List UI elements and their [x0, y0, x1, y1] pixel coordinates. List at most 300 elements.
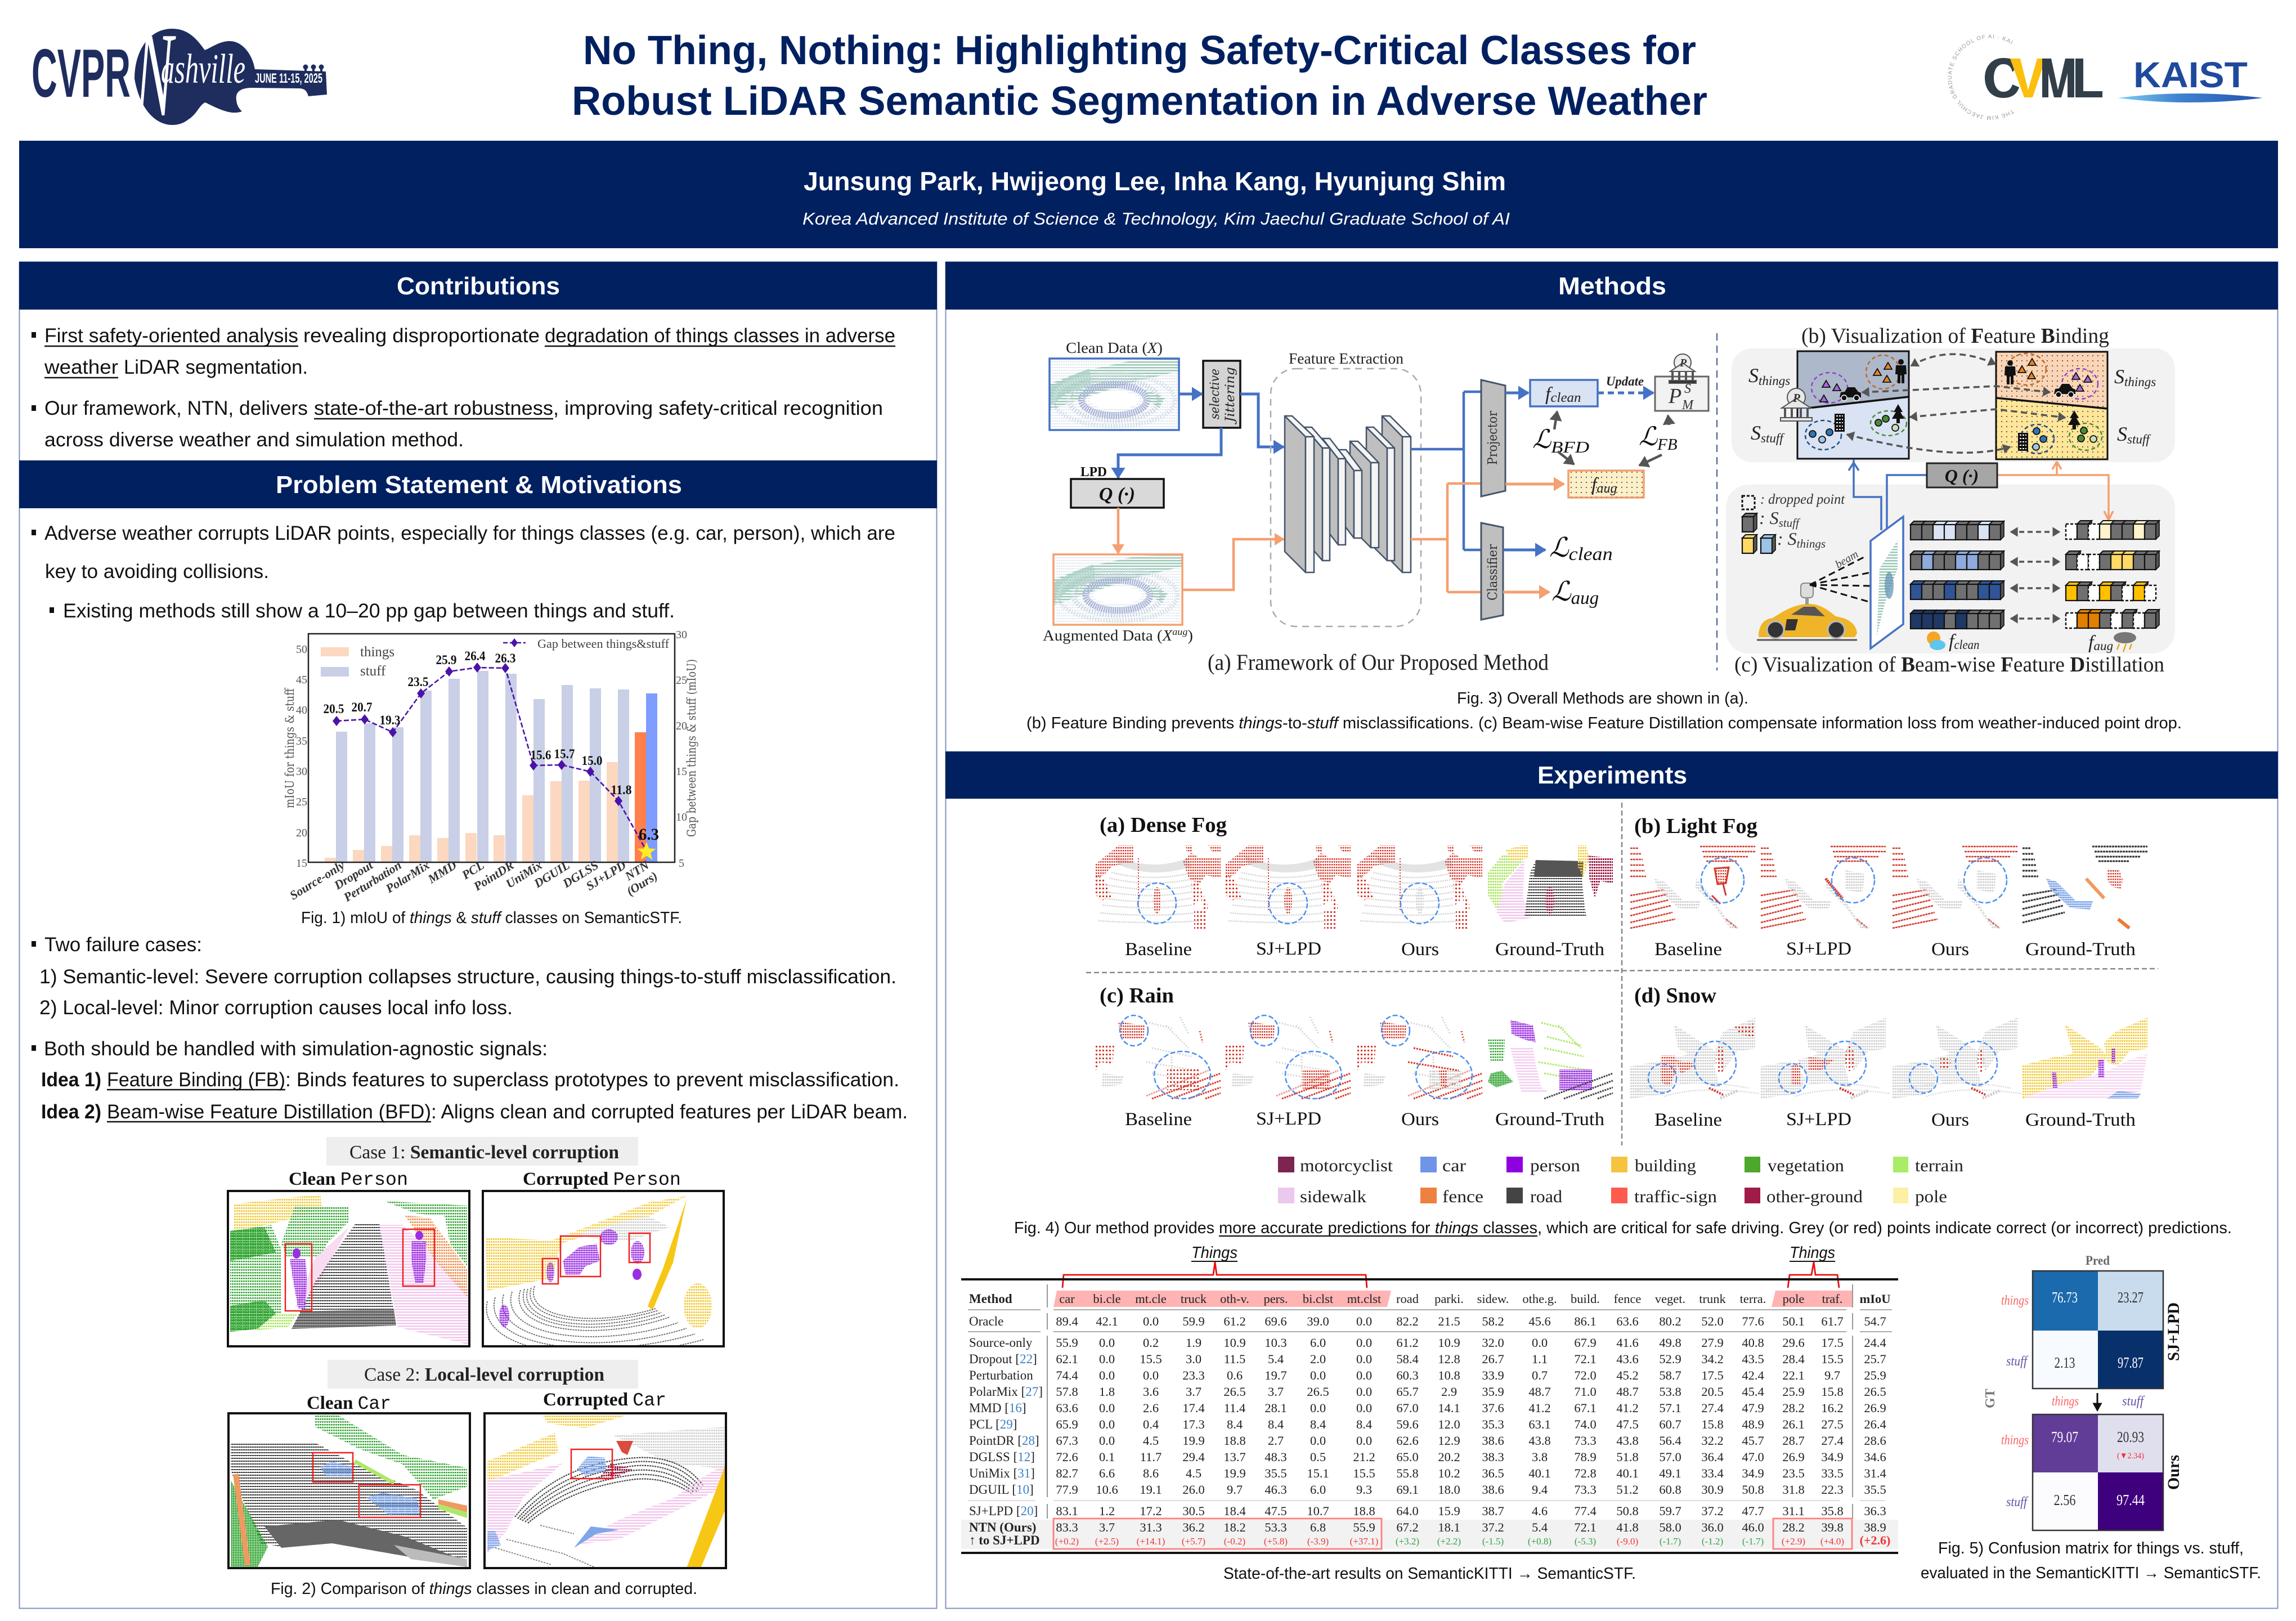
axis labels: things [2001, 1433, 2029, 1448]
axis ticks: 15 [296, 857, 307, 870]
x labels: (Ours) [624, 868, 660, 898]
values: 82.7 [1056, 1466, 1078, 1480]
values: 59.6 [1396, 1417, 1419, 1431]
values: 0.0 [1532, 1336, 1548, 1350]
image labels: SJ+LPD [1786, 1109, 1851, 1130]
method names: UniMix [31] [969, 1466, 1035, 1480]
values: 26.5 [1223, 1385, 1246, 1399]
values: 21.5 [1438, 1314, 1460, 1328]
values: 46.3 [1264, 1483, 1287, 1497]
selective jittering box: selective [1208, 369, 1222, 419]
values: 83.3 [1056, 1520, 1078, 1534]
panel: (d) Snow [1630, 984, 2147, 1130]
values: 50.8 [1742, 1483, 1764, 1497]
augmented data label: aug [1172, 626, 1187, 637]
legend: things [360, 644, 394, 660]
text: problem statement intro: Existing methods still show a 10–20 pp gap between things and stuff. [63, 600, 675, 622]
label: Ours: Ours [2164, 1455, 2183, 1490]
matrix: Ours: 20.93 [2117, 1429, 2144, 1445]
f aug box [1568, 471, 1644, 498]
values: 72.6 [1056, 1450, 1078, 1464]
values: 65.7 [1396, 1385, 1419, 1399]
augmented data image [1053, 554, 1182, 625]
case 1 heading: Case 1: Semantic-level corruption [349, 1142, 619, 1163]
loss BFD: BFD [1551, 438, 1589, 456]
method names: ↑ to SJ+LPD [969, 1533, 1040, 1547]
values: 26.9 [1864, 1401, 1886, 1415]
x labels: DGUIL [531, 858, 572, 891]
values: 26.0 [1182, 1483, 1205, 1497]
x labels: PolarMix [383, 858, 432, 896]
method names: MMD [16] [969, 1401, 1026, 1415]
image labels: Ground-Truth [2025, 1110, 2136, 1130]
value labels [323, 649, 659, 844]
values: 0.0 [1143, 1314, 1159, 1328]
legend [321, 637, 670, 679]
values: 56.4 [1659, 1434, 1681, 1448]
values: truck [1181, 1292, 1207, 1306]
values: 6.8 [1310, 1520, 1326, 1534]
output arrows [1503, 393, 1564, 592]
text: contributions list: , improving safety-critical recognition [553, 397, 883, 419]
axis labels: stuff [2122, 1394, 2145, 1409]
axis labels [1983, 1293, 2145, 1510]
values: 86.1 [1574, 1314, 1597, 1328]
orange arrows augmented [1118, 508, 1284, 590]
axis ticks: 30 [296, 765, 307, 778]
projector [1481, 380, 1505, 496]
values: 37.2 [1482, 1520, 1504, 1534]
values: 23.5 [1782, 1466, 1805, 1480]
bars: stuff [336, 671, 657, 862]
axis ticks [296, 629, 687, 870]
f aug label with cloud icon: f [2088, 632, 2093, 653]
method names: NTN (Ours) [969, 1520, 1036, 1534]
values: (+14.1) [1137, 1536, 1165, 1547]
values: 0.6 [1227, 1368, 1243, 1382]
values: 53.8 [1659, 1385, 1681, 1399]
values: 37.2 [1701, 1504, 1724, 1518]
values: 0.0 [1356, 1368, 1372, 1382]
clean data image [1050, 359, 1179, 430]
matrix: Ours: 97.44 [2116, 1492, 2145, 1508]
axis ticks: 20 [676, 720, 687, 732]
text: problem statement intro [32, 522, 895, 622]
legend: semantic classes: terrain [1915, 1156, 1964, 1175]
legend: stuff [360, 664, 386, 679]
loss aug: aug [1571, 588, 1599, 608]
image: baseline [1630, 847, 1755, 929]
text: contributions list [32, 325, 895, 451]
value labels: 25.9 [436, 653, 457, 667]
matrix: SJ+LPD: 2.13 [2054, 1354, 2075, 1371]
text: failure cases and ideas: 1) Semantic-level: Severe corruption collapses structure, causing things-to-stuff misclassification. [39, 966, 896, 988]
values: 52.0 [1701, 1314, 1724, 1328]
image: corrupted person point cloud [483, 1191, 724, 1354]
values: 27.4 [1821, 1434, 1844, 1448]
axis ticks: 50 [296, 643, 307, 656]
values: pers. [1263, 1292, 1288, 1306]
values: 3.7 [1268, 1385, 1284, 1399]
values: 8.4 [1310, 1417, 1326, 1431]
legend: semantic classes: road [1530, 1186, 1563, 1206]
f aug label with cloud icon [2088, 632, 2136, 653]
augmented data label: ) [1187, 627, 1193, 644]
values: 18.8 [1223, 1434, 1246, 1448]
augmented superclass square [1996, 352, 2107, 459]
logo: CVPR Nashville guitar: N [134, 7, 176, 142]
values: 72.0 [1574, 1368, 1597, 1382]
values: 24.4 [1864, 1336, 1886, 1350]
values: 14.1 [1438, 1401, 1460, 1415]
text: failure cases and ideas: : Binds features to superclass prototypes to prevent misclassification. [285, 1069, 899, 1091]
values: 27.4 [1701, 1401, 1724, 1415]
caption: Fig 1: Fig. 1) mIoU of things & stuff classes on SemanticSTF. [301, 909, 682, 927]
image: ours [1357, 1015, 1482, 1099]
values: 19.1 [1140, 1483, 1162, 1497]
image: ground truth [2023, 1018, 2147, 1099]
values: 39.8 [1821, 1520, 1844, 1534]
selective jittering box [1203, 361, 1240, 428]
values: 58.0 [1659, 1520, 1681, 1534]
values: 31.4 [1864, 1466, 1886, 1480]
values: 25.9 [1864, 1368, 1886, 1382]
image labels: Ground-Truth [1495, 939, 1605, 960]
values: 61.2 [1223, 1314, 1246, 1328]
values: 37.6 [1482, 1401, 1504, 1415]
values: 36.2 [1182, 1520, 1205, 1534]
Q operator box: Q (·) [1945, 465, 1979, 486]
values: (+4.0) [1820, 1536, 1844, 1547]
values: 36.5 [1482, 1466, 1504, 1480]
label: Corrupted Car: Corrupted Car [543, 1390, 666, 1411]
values: 89.4 [1056, 1314, 1078, 1328]
icon: star [637, 842, 656, 860]
values: 28.1 [1264, 1401, 1287, 1415]
values: build. [1571, 1292, 1600, 1306]
loss clean: clean [1569, 544, 1613, 565]
f aug box: aug [1597, 481, 1617, 496]
values: 1.9 [1186, 1336, 1201, 1350]
values: 26.9 [1782, 1450, 1805, 1464]
values: 47.5 [1616, 1417, 1639, 1431]
legend cubes: : dropped point [1760, 492, 1845, 507]
blue arrows input [1118, 394, 1284, 478]
values: 18.0 [1438, 1483, 1460, 1497]
values: 20.2 [1438, 1450, 1460, 1464]
dashed binding arrows [1847, 354, 2065, 453]
icon: prototype bank small [1781, 388, 1812, 421]
matrix: SJ+LPD: 97.87 [2118, 1354, 2143, 1371]
values: 63.6 [1616, 1314, 1639, 1328]
values: 15.8 [1821, 1385, 1844, 1399]
axis labels: things [2052, 1394, 2079, 1409]
prototype box: S [1684, 382, 1691, 396]
axis ticks: 15 [676, 765, 687, 778]
values: 50.1 [1782, 1314, 1805, 1328]
value labels: 20.7 [351, 700, 373, 714]
f clean box [1530, 380, 1598, 406]
method names [969, 1292, 1043, 1547]
logo: CVPR Nashville guitar [32, 7, 327, 142]
things labels and brackets: Things [1191, 1244, 1237, 1262]
S labels: S [1751, 422, 1761, 444]
text: contributions list: state-of-the-art robustness [314, 397, 553, 419]
axis titles: Gap between things & stuff (mIoU) [685, 659, 698, 837]
values: 32.0 [1482, 1336, 1504, 1350]
values: 17.3 [1182, 1417, 1205, 1431]
authors banner: Korea Advanced Institute of Science & Technology, Kim Jaechul Graduate School of AI [802, 209, 1510, 229]
values: 10.2 [1438, 1466, 1460, 1480]
values: 46.0 [1742, 1520, 1764, 1534]
values: 10.8 [1438, 1368, 1460, 1382]
value labels: 19.3 [379, 713, 401, 727]
values: (-1.2) [1702, 1536, 1723, 1547]
values: (-5.3) [1575, 1536, 1596, 1547]
value labels: 15.6 [530, 748, 551, 762]
values: 2.7 [1268, 1434, 1284, 1448]
values: 0.0 [1099, 1434, 1115, 1448]
values: 15.5 [1821, 1352, 1844, 1366]
text: contributions list: LiDAR segmentation. [124, 356, 308, 378]
case 2 heading: Case 2: Local-level corruption [364, 1364, 604, 1385]
values: 80.2 [1659, 1314, 1681, 1328]
values: 36.4 [1701, 1450, 1724, 1464]
values: (+0.8) [1528, 1536, 1551, 1547]
values: 6.0 [1310, 1336, 1326, 1350]
values: 23.3 [1182, 1368, 1205, 1382]
values: 6.0 [1310, 1483, 1326, 1497]
axis ticks: 20 [296, 827, 307, 839]
values: (-3.9) [1307, 1536, 1329, 1547]
feature extraction label: Feature Extraction [1289, 350, 1404, 367]
legend cubes: : S [1777, 529, 1797, 549]
image labels: Baseline [1654, 1110, 1722, 1130]
values: 31.1 [1782, 1504, 1805, 1518]
values: 61.7 [1821, 1314, 1844, 1328]
feature extraction dashed box [1271, 369, 1421, 626]
label: Pred: Pred [2086, 1253, 2110, 1268]
values: 67.9 [1574, 1336, 1597, 1350]
matrix: SJ+LPD [2033, 1271, 2163, 1389]
legend: semantic classes: fence [1442, 1186, 1483, 1206]
values: 38.6 [1482, 1483, 1504, 1497]
text: contributions list: weather [44, 356, 118, 378]
values: 9.4 [1532, 1483, 1548, 1497]
values: (+3.2) [1396, 1536, 1419, 1547]
legend cubes: stuff [1779, 516, 1801, 530]
heading: Contributions [19, 262, 937, 310]
axis titles [283, 659, 698, 837]
legend: semantic classes: traffic-sign [1634, 1186, 1717, 1206]
panel: (b) Light Fog [1630, 814, 2147, 960]
values: 13.7 [1223, 1450, 1246, 1464]
update arrow: Update [1606, 374, 1644, 388]
values: 61.2 [1396, 1336, 1419, 1350]
heading: Problem Statement and Motivations: Problem Statement & Motivations [276, 471, 682, 499]
values: 48.7 [1616, 1385, 1639, 1399]
values: 73.3 [1574, 1434, 1597, 1448]
Q operator box [1927, 463, 1997, 487]
legend cubes: : S [1759, 508, 1779, 528]
values: (+5.8) [1264, 1536, 1288, 1547]
heading: Experiments [945, 751, 2278, 799]
axis titles: mIoU for things & stuff [283, 687, 297, 808]
values: 72.1 [1574, 1520, 1597, 1534]
chart: mIoU bars and gap line [283, 629, 698, 904]
image: baseline [1096, 845, 1221, 929]
values: 28.4 [1782, 1352, 1805, 1366]
values: (+2.9) [1782, 1536, 1805, 1547]
icon: yellow car with lidar [1757, 583, 1857, 640]
arrow between matrices [2094, 1393, 2101, 1410]
values: 45.7 [1742, 1434, 1764, 1448]
axis labels: stuff [2006, 1495, 2029, 1510]
panel: right column [945, 262, 2278, 1609]
values: 62.1 [1056, 1352, 1078, 1366]
matrix: Ours: 79.07 [2051, 1429, 2078, 1445]
panel: (c) Rain [1096, 984, 1613, 1130]
method names: Perturbation [969, 1368, 1033, 1382]
legend: semantic classes: other-ground [1766, 1186, 1863, 1206]
values: 72.1 [1574, 1352, 1597, 1366]
values: 67.2 [1396, 1520, 1419, 1534]
text: contributions list: revealing disproportionate [303, 325, 540, 347]
loss FB: ℒ [1639, 421, 1657, 451]
values: 47.7 [1742, 1504, 1764, 1518]
augmented data label: Augmented Data ( X [1043, 627, 1172, 644]
values: 0.0 [1310, 1368, 1326, 1382]
label: Clean Person: Clean Person [289, 1169, 408, 1190]
values: 8.6 [1143, 1466, 1159, 1480]
values: 41.8 [1616, 1520, 1639, 1534]
values: 42.1 [1096, 1314, 1118, 1328]
values: 41.2 [1528, 1401, 1551, 1415]
f clean label with sun icon: clean [1954, 638, 1979, 652]
values: 3.7 [1186, 1385, 1201, 1399]
image: clean car point cloud [228, 1413, 470, 1568]
method names: PointDR [28] [969, 1434, 1039, 1448]
values: 0.0 [1310, 1401, 1326, 1415]
legend: semantic classes: vegetation [1768, 1156, 1845, 1175]
f clean box: f [1545, 384, 1550, 405]
values: 30.9 [1701, 1483, 1724, 1497]
axis ticks: 40 [296, 704, 307, 717]
values: 74.4 [1056, 1368, 1078, 1382]
values: parki. [1434, 1292, 1464, 1306]
values: 12.9 [1438, 1434, 1460, 1448]
values: 18.1 [1438, 1520, 1460, 1534]
values: 19.7 [1264, 1368, 1287, 1382]
values: 38.9 [1864, 1520, 1886, 1534]
legend: semantic classes [1278, 1156, 1964, 1206]
values: 33.5 [1821, 1466, 1844, 1480]
values: 69.1 [1396, 1483, 1419, 1497]
values: 54.7 [1864, 1314, 1886, 1328]
values: 27.9 [1701, 1336, 1724, 1350]
corrupted feature cubes [2066, 521, 2159, 628]
selective jittering box: Jittering [1223, 367, 1237, 424]
values: terra. [1740, 1292, 1766, 1306]
panel: (a) Dense Fog [1096, 813, 1613, 960]
legend cubes [1742, 492, 1845, 553]
image labels: Baseline [1125, 1109, 1192, 1130]
legend: semantic classes: building [1635, 1156, 1696, 1175]
legend cubes: things [1797, 537, 1826, 550]
values: 12.8 [1438, 1352, 1460, 1366]
image labels: Baseline [1125, 939, 1192, 960]
values: 0.2 [1143, 1336, 1159, 1350]
values: 15.9 [1438, 1504, 1460, 1518]
values: 0.0 [1099, 1352, 1115, 1366]
image: ground truth [1488, 1020, 1613, 1099]
values: 40.1 [1616, 1466, 1639, 1480]
values: 2.0 [1310, 1352, 1326, 1366]
caption: Fig 3: Fig. 3) Overall Methods are shown in (a). [1457, 689, 1748, 707]
values: 58.2 [1482, 1314, 1504, 1328]
clean superclass square [1797, 351, 1909, 459]
image labels [1654, 939, 2136, 960]
method names: Method [969, 1292, 1012, 1306]
image labels: Ground-Truth [2025, 939, 2136, 960]
caption (a): (a) Framework of Our Proposed Method [1208, 650, 1549, 675]
axis ticks: 25 [676, 674, 687, 687]
heading: (a) Dense Fog [1100, 813, 1227, 837]
values: 60.8 [1659, 1483, 1681, 1497]
image labels [1125, 939, 1605, 960]
values: 19.9 [1223, 1466, 1246, 1480]
authors banner: Junsung Park, Hwijeong Lee, Inha Kang, Hyunjung Shim [804, 167, 1506, 196]
f aug box: f [1591, 474, 1597, 495]
values: 0.0 [1143, 1368, 1159, 1382]
caption (b): (b) Visualization of Feature Binding [1801, 324, 2109, 348]
legend: semantic classes: car [1442, 1156, 1467, 1175]
values: 35.3 [1482, 1417, 1504, 1431]
x labels: UniMix [503, 858, 545, 891]
values: 9.7 [1227, 1483, 1243, 1497]
image labels [1125, 1109, 1605, 1130]
logo: KAIST: KAIST [2133, 55, 2248, 95]
values: (-1.7) [1660, 1536, 1681, 1547]
beam lines [1810, 548, 1871, 602]
Q operator box [1071, 479, 1164, 508]
values: 34.9 [1742, 1466, 1764, 1480]
case 1 heading [326, 1137, 638, 1166]
text: failure cases and ideas: Feature Binding (FB) [107, 1069, 285, 1091]
matrix: SJ+LPD: 76.73 [2052, 1289, 2078, 1306]
text: contributions list: across diverse weather and simulation method. [44, 429, 464, 451]
x labels [287, 857, 660, 904]
values: 3.6 [1143, 1385, 1159, 1399]
values: 67.1 [1574, 1401, 1597, 1415]
values: 15.8 [1701, 1417, 1724, 1431]
S labels [1748, 364, 2156, 446]
values: 12.0 [1438, 1417, 1460, 1431]
LPD label: LPD [1080, 465, 1107, 480]
loss aug: ℒ [1551, 576, 1571, 607]
values: 65.0 [1396, 1450, 1419, 1464]
image: corrupted car point cloud [485, 1413, 726, 1568]
values: 15.5 [1140, 1352, 1162, 1366]
values: 60.3 [1396, 1368, 1419, 1382]
projector: Projector [1486, 411, 1500, 465]
values: 57.1 [1659, 1401, 1681, 1415]
values: 6.6 [1099, 1466, 1115, 1480]
values: 18.4 [1223, 1504, 1246, 1518]
legend: semantic classes: pole [1915, 1186, 1947, 1206]
values: 8.4 [1356, 1417, 1372, 1431]
values: 82.2 [1396, 1314, 1419, 1328]
